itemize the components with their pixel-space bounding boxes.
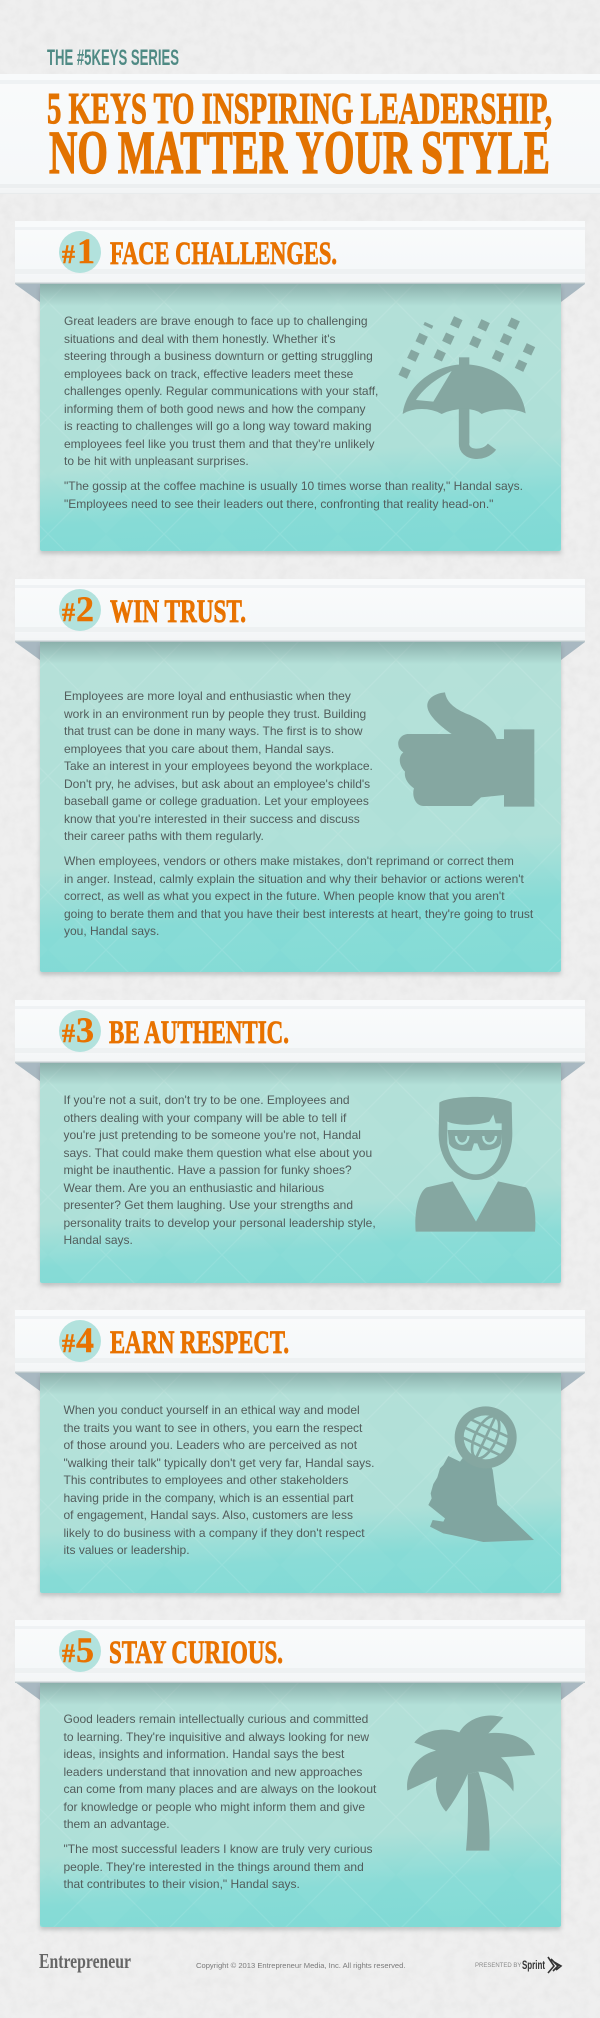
text: body copy: the traits you want to see in others, you earn the respect [64,1420,362,1434]
text: body copy: of those around you. Leaders who are perceived as not [64,1438,357,1452]
text: body copy: its values or leadership. [64,1543,190,1557]
text: body copy: to be hit with unpleasant surprises. [64,454,249,468]
text: second paragraph [64,854,534,938]
text: body copy: personality traits to develop your personal leadership style, [64,1216,376,1230]
section 1: face challenges [15,221,585,556]
section 5: stay curious [15,1620,585,1932]
text: body copy: leaders understand that innovation and new approaches [64,1764,362,1778]
section 2: win trust [15,579,585,977]
text: quote: "The most successful leaders I know are truly very curious [64,1842,373,1856]
text: body copy: them an advantage. [64,1817,170,1831]
text: quote: "Employees need to see their leaders out there, confronting that reality head-on." [64,496,493,510]
text: body copy: to learning. They're inquisitive and always looking for new [64,1730,369,1744]
text: body copy: work in an environment run by people they trust. Building [64,706,366,720]
panel fold triangles [15,284,585,302]
heading text: EARN RESPECT. [110,1325,289,1361]
section 3: be authentic [15,1000,585,1288]
text: body copy: Handal says. [64,1233,133,1247]
text: body copy: of engagement, Handal says. Also, customers are less [64,1508,353,1522]
number badge: 3 [76,1010,94,1050]
heading text: FACE CHALLENGES. [110,236,337,272]
number badge [59,589,246,631]
text: body copy: challenges openly. Regular communications with your staff, [64,384,378,398]
text: body copy: employees that you care about them, Handal says. [64,742,334,756]
text: body copy: that trust can be done in many ways. The first is to show [64,724,363,738]
number badge: # [62,1639,75,1668]
heading text: BE AUTHENTIC. [109,1015,289,1051]
text: second paragraph: When employees, vendors or others make mistakes, don't reprimand or correct them [64,854,514,868]
ribbon heading [15,221,585,284]
number badge: 5 [76,1630,94,1670]
panel fold triangles [15,1063,585,1081]
text: quote [64,1842,373,1891]
text: body copy: ideas, insights and information. Handal says the best [64,1747,344,1761]
number badge: 1 [77,231,95,271]
icon: hand holding globe microphone [428,1406,534,1542]
text: body copy: Don't pry, he advises, but ask about an employee's child's [64,776,370,790]
text: body copy [64,314,378,468]
text: body copy: informing them of both good news and how the company [64,402,366,416]
title text [47,84,552,187]
panel fold triangles [15,1373,585,1391]
text: second paragraph: in anger. Instead, calmly explain the situation and why their behavior or actions weren't [64,872,524,886]
icon: palm tree [407,1716,535,1851]
text: body copy: says. That could make them question what else about you [64,1146,372,1160]
text: body copy: employees feel like you trust them and that they're unlikely [64,436,374,450]
number badge [59,231,337,273]
text: body copy: "walking their talk" typically don't get very far, Handal says. [64,1456,374,1470]
text: body copy: Employees are more loyal and enthusiastic when they [64,689,351,703]
text: body copy: might be inauthentic. Have a passion for funky shoes? [64,1163,352,1177]
ribbon heading [15,1620,585,1683]
number badge: # [62,240,75,269]
text: body copy: for knowledge or people who might inform them and give [64,1800,365,1814]
text: quote: "The gossip at the coffee machine is usually 10 times worse than reality," Handal says. [64,479,523,493]
text: body copy: is reacting to challenges will go a long way toward making [64,419,372,433]
number badge: # [62,1329,75,1358]
icon: thumbs up [398,692,534,807]
panel fold triangles [15,642,585,660]
panel fold triangles [16,1683,584,1700]
text: quote: that contributes to their vision," Handal says. [64,1877,300,1891]
number badge: # [62,1019,75,1048]
number badge: # [62,598,75,627]
text: body copy: Take an interest in your employees beyond the workplace. [64,759,373,773]
number badge: 4 [76,1320,94,1360]
icon: umbrella in rain [398,316,536,459]
text: body copy: others dealing with your company will be able to tell if [64,1110,346,1124]
text: second paragraph: going to berate them and that you have their best interests at heart, they're going to trust [64,906,533,920]
logo: Sprint: Sprint [522,1958,545,1972]
text: body copy: This contributes to employees and other stakeholders [64,1473,348,1487]
title banner [0,74,600,194]
presented by: PRESENTED BY [475,1963,521,1969]
text: body copy: employees back on track, effective leaders meet these [64,366,353,380]
text: second paragraph: you, Handal says. [64,924,159,938]
number badge [59,1320,289,1362]
text: body copy: If you're not a suit, don't try to be one. Employees and [64,1093,350,1107]
text: body copy: baseball game or college graduation. Let your employees [64,794,369,808]
text: body copy [64,1712,376,1831]
ribbon heading [15,1000,585,1063]
text: body copy: likely to do business with a company if they don't respect [64,1526,365,1540]
text: body copy: having pride in the company, which is an essential part [64,1490,353,1504]
number badge: 2 [76,589,94,629]
text: body copy [64,1093,376,1247]
panel body [40,1063,561,1283]
panel body [40,1683,561,1927]
text: body copy: steering through a business downturn or getting struggling [64,349,373,363]
section 4: earn respect [15,1310,585,1598]
text: body copy [64,689,373,843]
heading text: STAY CURIOUS. [109,1635,283,1671]
text: body copy: you're just pretending to be someone you're not, Handal [64,1128,361,1142]
icon: person with glasses [415,1096,536,1232]
text: body copy: can come from many places and are always on the lookout [64,1782,376,1796]
panel body [40,642,561,972]
text: quote [64,479,523,510]
text: body copy: Wear them. Are you an enthusiastic and hilarious [64,1180,324,1194]
heading text: WIN TRUST. [110,594,246,630]
panel body [40,284,561,551]
text: body copy: situations and deal with them honestly. Whether it's [64,332,336,346]
text: quote: people. They're interested in the things around them and [64,1860,364,1874]
text: second paragraph: correct, as well as what you expect in the future. When people know that you aren't [64,889,505,903]
number badge [59,1630,283,1672]
number badge [59,1010,289,1052]
footer [39,1949,562,1974]
text: body copy: When you conduct yourself in an ethical way and model [64,1403,360,1417]
text: body copy: Great leaders are brave enough to face up to challenging [64,314,368,328]
text: body copy: presenter? Get them laughing. Use your strengths and [64,1198,353,1212]
text: body copy [64,1403,374,1557]
panel body [40,1373,561,1593]
ribbon heading [15,579,585,642]
copyright: Copyright © 2013 Entrepreneur Media, Inc. All rights reserved. [196,1961,405,1970]
text: body copy: Good leaders remain intellectually curious and committed [64,1712,368,1726]
ribbon heading [15,1310,585,1373]
text: body copy: their career paths with them regularly. [64,829,264,843]
text: body copy: know that you're interested in their success and discuss [64,812,360,826]
